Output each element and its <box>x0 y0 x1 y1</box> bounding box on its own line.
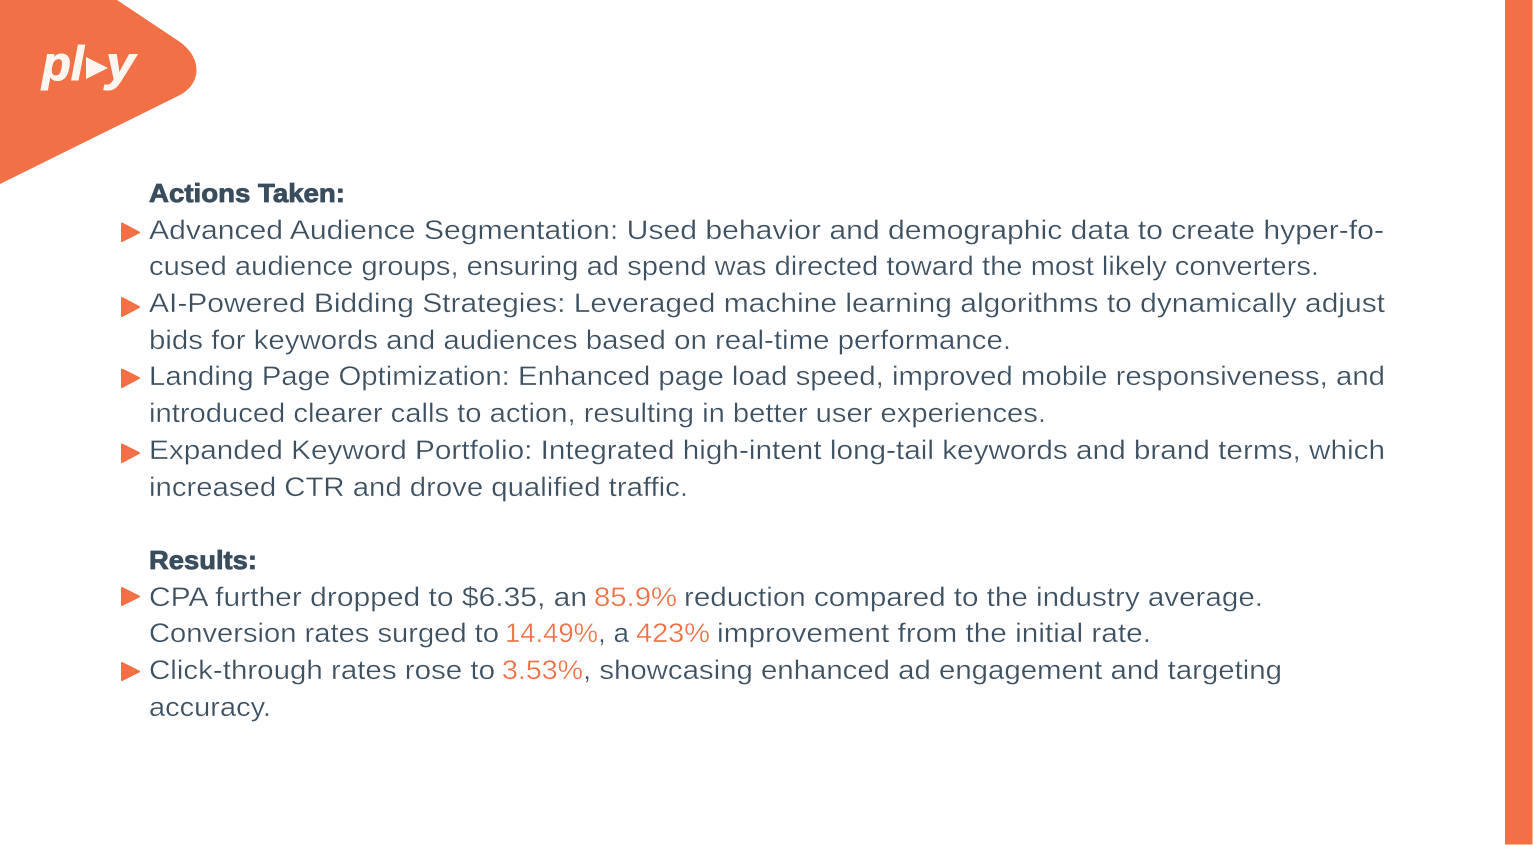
action 1: audience segmentation <box>122 215 1384 281</box>
action 4: keyword portfolio <box>122 435 1385 502</box>
action 1: audience segmentation: Advanced Audience Segmentation: Used behavior and demographic data to create hyper-fo- <box>149 215 1384 245</box>
action 3: landing page optimization: Landing Page Optimization: Enhanced page load speed, improved mobile responsiveness, and <box>149 361 1385 391</box>
result 2: click-through rates: 3.53% <box>502 655 583 685</box>
result 2: click-through rates: Click-through rates rose to <box>149 655 495 685</box>
logo wordmark <box>40 38 137 91</box>
bullet icon <box>122 370 139 387</box>
logo badge <box>0 0 196 184</box>
result 1: CPA and conversion rates: 14.49% <box>505 618 598 648</box>
result 1: CPA and conversion rates: 85.9% <box>594 582 677 612</box>
right accent bar <box>1505 0 1532 844</box>
heading: results: Results: <box>149 545 257 575</box>
results list <box>122 582 1282 722</box>
result 2: click-through rates: accuracy. <box>149 692 271 722</box>
result 1: CPA and conversion rates: CPA further dropped to $6.35, an <box>149 582 587 612</box>
bullet icon <box>122 663 139 680</box>
result 1: CPA and conversion rates: Conversion rates surged to <box>149 618 499 648</box>
action 4: keyword portfolio: increased CTR and drove qualified traffic. <box>149 472 688 502</box>
result 2: click-through rates <box>122 655 1282 722</box>
result 1: CPA and conversion rates: improvement from the initial rate. <box>717 618 1151 648</box>
bullet icon <box>122 224 139 241</box>
logo wordmark: pl <box>40 38 86 91</box>
result 1: CPA and conversion rates <box>122 582 1263 648</box>
action 2: bidding strategies: AI-Powered Bidding Strategies: Leveraged machine learning algorithms to dynamically adjust <box>149 288 1386 318</box>
actions list <box>122 215 1386 502</box>
bullet icon <box>122 588 139 605</box>
bullet icon <box>122 444 139 462</box>
action 3: landing page optimization: introduced clearer calls to action, resulting in better user experiences. <box>149 398 1046 428</box>
action 2: bidding strategies: bids for keywords and audiences based on real-time performance. <box>149 325 1011 355</box>
result 1: CPA and conversion rates: 423% <box>636 618 710 648</box>
logo wordmark: y <box>104 38 137 91</box>
result 1: CPA and conversion rates: , a <box>598 618 629 648</box>
result 1: CPA and conversion rates: reduction compared to the industry average. <box>684 582 1263 612</box>
bullet icon <box>122 298 139 316</box>
result 2: click-through rates: , showcasing enhanced ad engagement and targeting <box>583 655 1282 685</box>
action 4: keyword portfolio: Expanded Keyword Portfolio: Integrated high-intent long-tail keywords and brand terms, which <box>149 435 1385 465</box>
badge shape <box>0 0 196 184</box>
action 2: bidding strategies <box>122 288 1386 355</box>
heading: actions taken: Actions Taken: <box>149 178 345 208</box>
action 1: audience segmentation: cused audience groups, ensuring ad spend was directed toward the most likely converters. <box>149 251 1319 281</box>
action 3: landing page optimization <box>122 361 1385 428</box>
